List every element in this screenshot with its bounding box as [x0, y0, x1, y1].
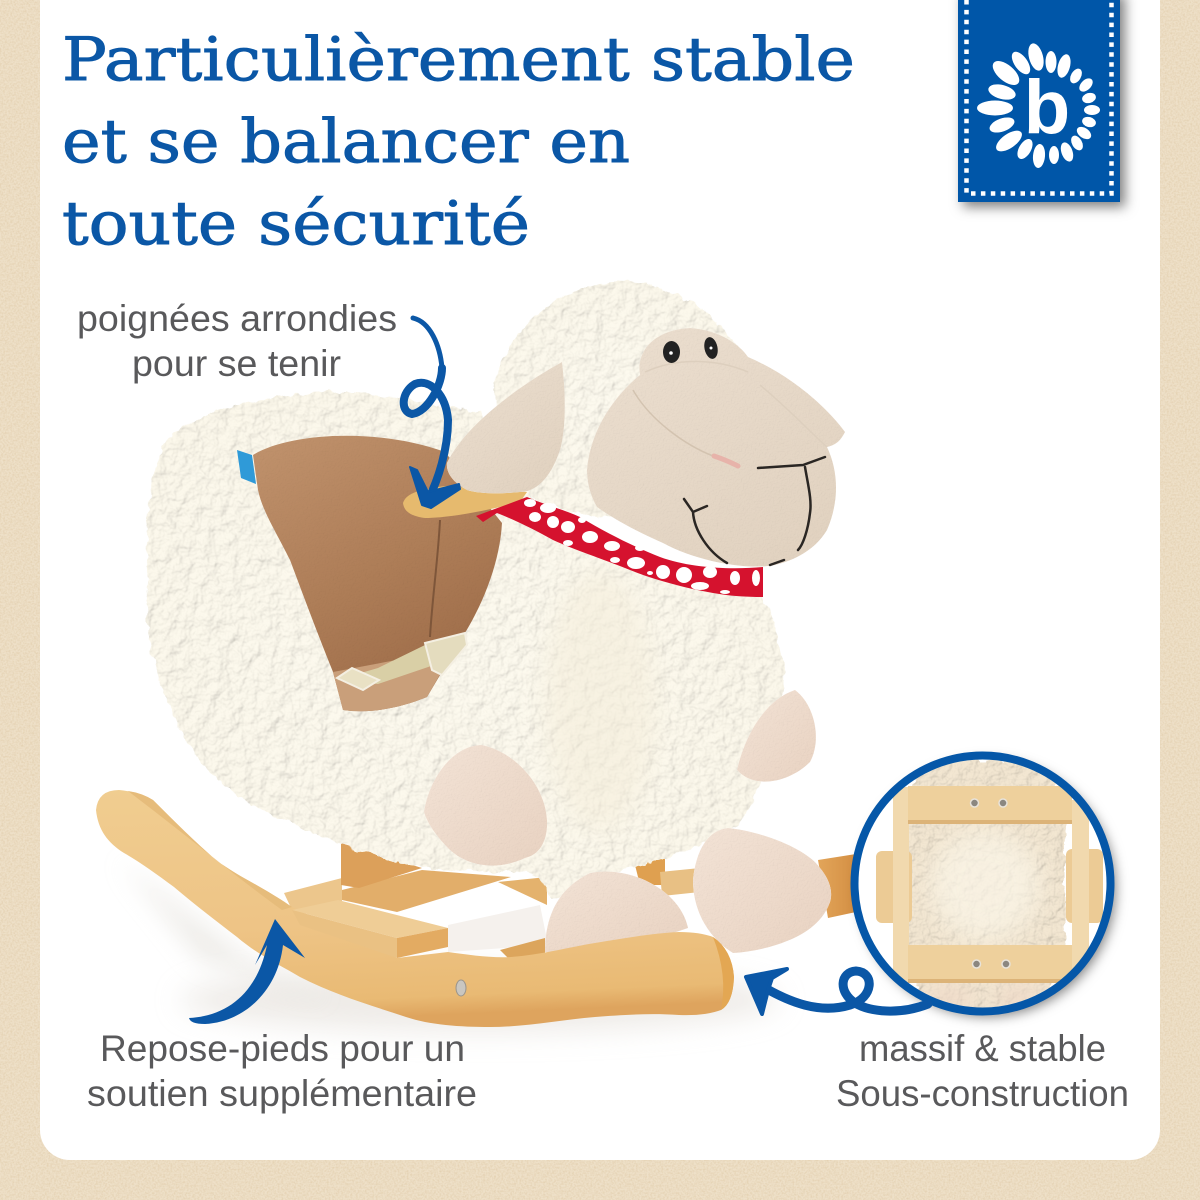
rails — [893, 787, 909, 983]
screws — [970, 799, 1010, 968]
fleece underside — [905, 760, 1065, 1010]
rear supports — [284, 843, 856, 960]
right arm — [737, 690, 816, 782]
inset: underside construction — [850, 750, 1120, 1020]
caption: handles: poignées arrondies — [77, 298, 397, 339]
title: et se balancer en — [62, 107, 630, 177]
planks — [908, 786, 1072, 820]
front arm — [424, 745, 547, 866]
chest tuft — [545, 570, 655, 830]
caption: footrest — [87, 1028, 477, 1114]
side tabs — [876, 851, 912, 923]
caption: base: massif & stable — [859, 1028, 1106, 1069]
caption: handles — [77, 298, 397, 384]
seat cushion — [253, 436, 502, 711]
arrow: handle — [404, 318, 460, 508]
arrow: base — [746, 969, 928, 1014]
caption: footrest: soutien supplémentaire — [87, 1073, 477, 1114]
caption: handles: pour se tenir — [132, 343, 341, 384]
rear foot — [693, 828, 831, 953]
wool body and seat shell — [147, 392, 784, 900]
front rocker with footrest — [96, 790, 734, 1027]
nose and smile — [684, 456, 825, 565]
caption: base: Sous-construction — [836, 1073, 1129, 1114]
rocking sheep product illustration — [96, 280, 856, 1032]
caption: base — [836, 1028, 1129, 1114]
arrow: footrest — [189, 919, 305, 1024]
left ear — [447, 362, 565, 493]
scarf — [476, 497, 763, 597]
blue label — [237, 450, 256, 484]
head wool — [495, 280, 751, 520]
title: toute sécurité — [62, 189, 530, 259]
face: forehead and muzzle — [587, 328, 845, 567]
brand logo tag — [958, 0, 1120, 202]
title: Particulièrement stable — [62, 25, 855, 95]
front foot — [545, 872, 688, 952]
brand logo tag: b — [1024, 65, 1070, 150]
title — [62, 25, 855, 259]
handle — [403, 486, 527, 518]
caption: footrest: Repose-pieds pour un — [100, 1028, 465, 1069]
floor shadow — [120, 860, 780, 1032]
eyes — [663, 336, 720, 363]
